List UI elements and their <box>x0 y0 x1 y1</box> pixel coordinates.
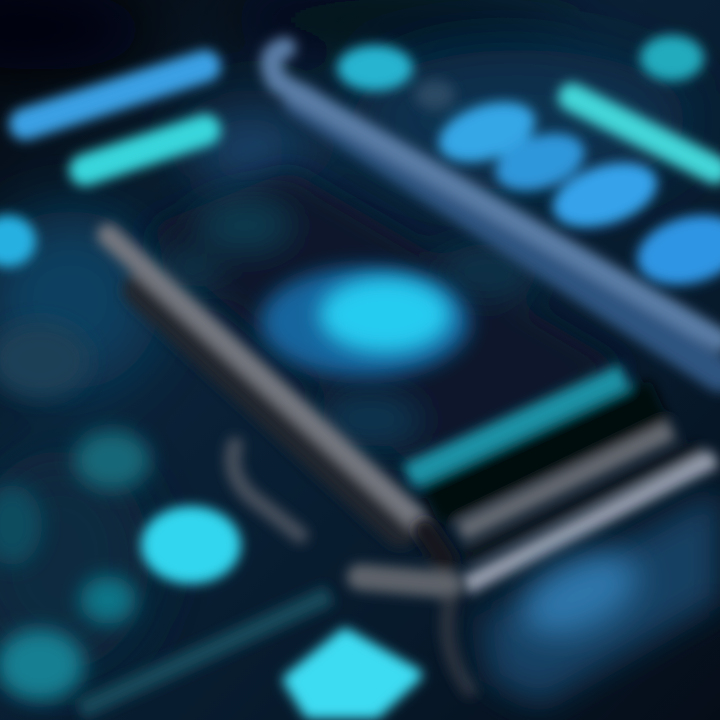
phone frame: grey diagonal edge <box>108 235 420 535</box>
bar: black band <box>430 400 660 505</box>
panel: left side icons <box>0 215 415 712</box>
icon: teal top right <box>640 35 704 81</box>
bar: bright teal diagonal <box>572 97 715 170</box>
icon: blue pill 4 <box>629 204 720 296</box>
icon: left edge cyan circle <box>0 215 36 267</box>
icon: dim grey disc <box>0 322 90 398</box>
icon: bottom cyan rounded square <box>290 635 415 712</box>
panel: upper right app icons <box>337 35 720 296</box>
bar: grey band <box>460 430 672 532</box>
icon: blue pill 3 <box>545 151 665 239</box>
icon: blue pill 1 <box>431 91 543 173</box>
icon: dim teal circle <box>74 430 150 490</box>
bar: lower dark teal diagonal <box>80 595 330 710</box>
icon: blue pill 2 <box>488 123 592 201</box>
icon: teal top pill <box>337 45 413 91</box>
phone corner: grey joint <box>360 530 470 690</box>
panel: upper left bars <box>25 66 205 170</box>
side button <box>233 445 300 535</box>
icon: cyan circle <box>141 506 241 584</box>
icon: dim dot <box>415 80 455 110</box>
bar: blue <box>25 66 205 124</box>
icon: dim teal left <box>0 485 42 565</box>
panel: phone corner stack <box>408 376 715 586</box>
icon: central glowing ellipse <box>260 267 470 377</box>
panel: dark phone screen <box>140 170 630 480</box>
icon: teal lower left <box>0 629 84 701</box>
icon: teal small <box>80 576 136 624</box>
bar: teal <box>85 130 205 170</box>
bar: teal band <box>408 376 625 476</box>
bar: dark band <box>465 448 700 556</box>
panel: lower right blue glow <box>480 490 720 705</box>
phone frame: upper steel edge <box>271 48 720 375</box>
bar: light grey band <box>465 458 715 586</box>
